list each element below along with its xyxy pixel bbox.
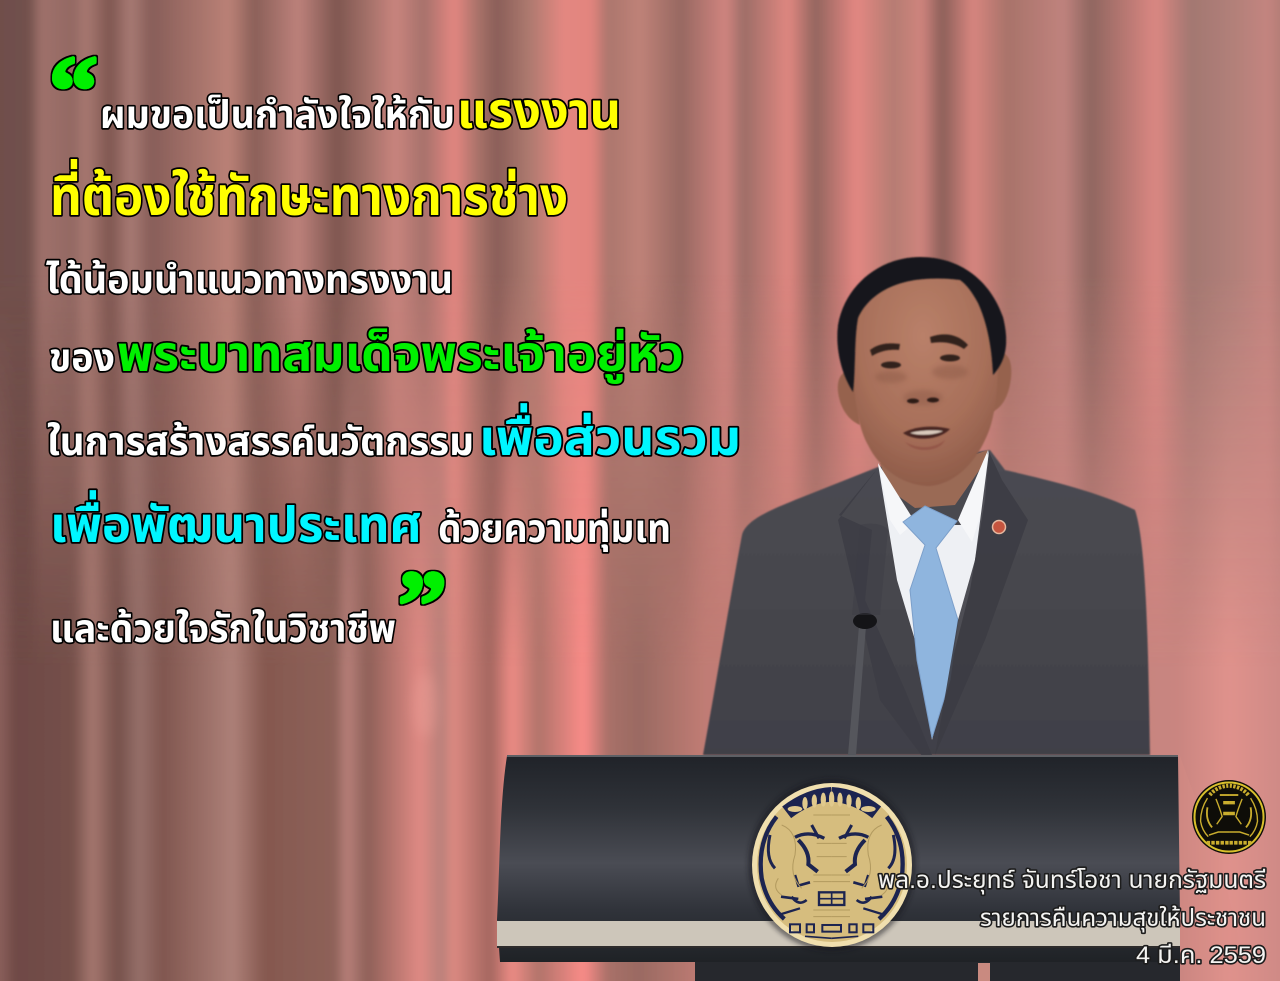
line 1 [100,83,621,139]
line 1: ผมขอเป็นกำลังใจให้กับ [100,94,455,137]
line 3: ได้น้อมนำแนวทางทรงงาน [46,259,453,302]
jacket lapels [838,452,1028,760]
line 4: ของ [49,337,115,380]
ears [838,352,1011,425]
necktie [903,506,958,738]
line 7: และด้วยใจรักในวิชาชีพ [50,608,396,651]
lapel pin [992,520,1006,534]
podium body [497,756,1180,962]
line 5: เพื่อส่วนรวม [479,403,741,466]
microphone [848,524,888,755]
nose and mouth [903,398,950,450]
caption: speaker, programme and date: รายการคืนความสุขให้ประชาชน [980,905,1266,933]
hair [837,257,1006,392]
small government seal [1192,780,1266,854]
podium base [695,960,1180,981]
caption: speaker, programme and date [878,867,1266,969]
line 1: แรงงาน [457,83,621,139]
eyebrows and eyes [870,334,968,368]
jacket [703,450,1150,755]
eye bags and nose shading [875,365,968,406]
head [854,272,998,486]
line 2: ที่ต้องใช้ทักษะทางการช่าง [50,159,568,227]
line 6: เพื่อพัฒนาประเทศ [50,490,422,553]
lower right curtain edge [1180,756,1244,960]
line 6: ด้วยความทุ่มเท [438,508,671,552]
quote text block [46,37,741,660]
line 5: ในการสร้างสรรค์นวัตกรรม [47,421,474,464]
line 6 [50,490,671,553]
line 4: พระบาทสมเด็จพระเจ้าอยู่หัว [117,326,684,384]
podium [497,755,1180,981]
line 5 [47,403,741,466]
photo: prime minister speaking [703,257,1150,760]
podium seal [748,779,916,951]
opening quotation mark: “ [49,37,98,145]
caption: speaker, programme and date: 4 มี.ค. 2559 [1136,942,1266,969]
caption: speaker, programme and date: พล.อ.ประยุทธ์ จันทร์โอชา นายกรัฐมนตรี [878,867,1266,895]
closing quotation mark: ” [398,552,447,660]
podium stripe [497,921,1180,946]
neck and shirt [878,450,989,740]
